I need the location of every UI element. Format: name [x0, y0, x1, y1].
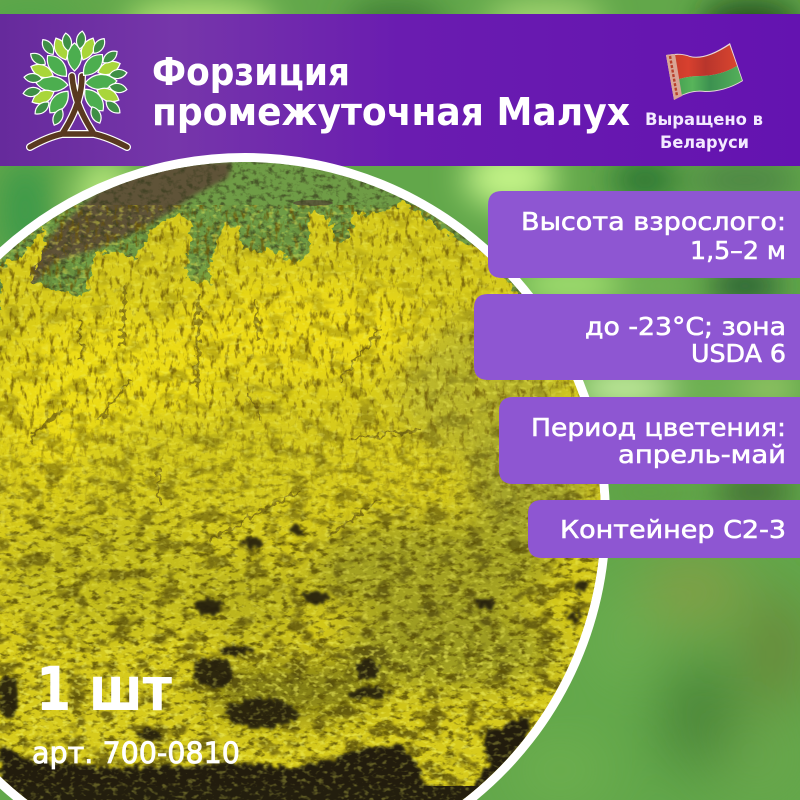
- panel: frost hardiness: [474, 294, 800, 380]
- branch strokes: [30, 285, 420, 540]
- inner leaves: [36, 43, 117, 117]
- article number: арт. 700-0810: [32, 736, 240, 770]
- light and dark foliage masses: [0, 280, 590, 718]
- leaf texture: [0, 205, 610, 800]
- title: промежуточная Малух: [152, 90, 630, 134]
- title: Форзиция: [152, 50, 350, 94]
- lime leaves: [29, 36, 122, 108]
- panel: mature height: [488, 191, 800, 278]
- quantity label: 1 шт: [36, 654, 173, 725]
- dark ground at the bottom: [0, 715, 530, 800]
- foliage mass with jagged top edge: [0, 203, 610, 800]
- panel: flowering period: [499, 397, 800, 484]
- panel: flowering period: Период цветения:: [531, 413, 786, 442]
- text: grown in Belarus: Беларуси: [660, 133, 749, 153]
- solid foliage base under the jagged edge: [0, 310, 610, 800]
- panel: mature height: Высота взрослого:: [521, 207, 786, 236]
- panel: flowering period: апрель-май: [618, 440, 786, 469]
- sparse yellow leaves and twigs over the dark ground: [0, 640, 610, 800]
- title: [152, 50, 630, 134]
- text: grown in Belarus: Выращено в: [645, 110, 763, 130]
- panel: mature height: 1,5–2 м: [690, 236, 786, 265]
- trunk and roots: [30, 76, 127, 147]
- soil and grass behind the bush: [0, 162, 522, 310]
- white circle ring behind photo: [0, 153, 610, 800]
- outer dark leaves: [22, 30, 128, 127]
- panel: container size: Контейнер С2-3: [560, 515, 786, 544]
- photo: yellow forsythia bush: [0, 160, 610, 800]
- text: grown in Belarus: [645, 110, 763, 153]
- panel: frost hardiness: до -23°C; зона: [585, 312, 786, 341]
- header band: [0, 14, 800, 166]
- logo: tree: [22, 30, 128, 147]
- icon: Belarus flag: [666, 43, 743, 100]
- panel: frost hardiness: USDA 6: [691, 339, 786, 368]
- dark gaps between branches: [0, 525, 587, 741]
- panel: container size: [528, 500, 800, 558]
